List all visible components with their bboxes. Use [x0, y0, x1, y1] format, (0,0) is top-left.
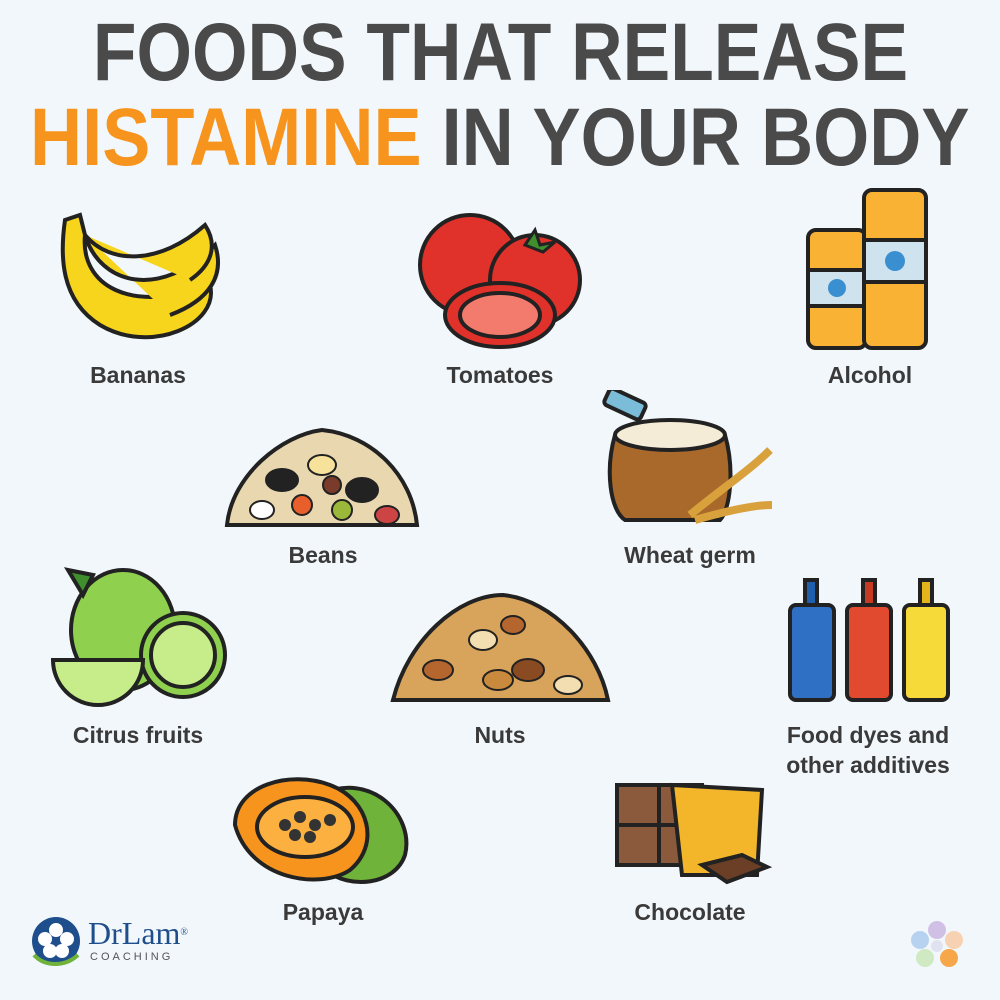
label: beans: Beans	[288, 542, 358, 568]
icon: beans	[224, 428, 420, 527]
logo: DrLam Coaching	[32, 915, 188, 966]
icon: wheat germ sack	[602, 390, 773, 524]
label: papaya: Papaya	[283, 899, 363, 925]
icon: tomatoes	[418, 213, 582, 349]
icon: papaya	[233, 777, 408, 884]
icon: food dye bottles	[788, 578, 950, 702]
label: alcohol: Alcohol	[828, 362, 912, 388]
label: bananas: Bananas	[90, 362, 186, 388]
icon: citrus fruits	[51, 567, 227, 707]
label: citrus fruits: Citrus fruits	[73, 722, 203, 748]
label: chocolate: Chocolate	[634, 899, 746, 925]
icon: bananas	[60, 212, 220, 340]
logo: DrLam Coaching: DrLam®	[88, 915, 188, 951]
icon: flower logo	[911, 921, 963, 967]
label: food dyes: Food dyes and	[787, 722, 949, 748]
label: food dyes	[786, 722, 950, 778]
title line 1: FOODS THAT RELEASE	[92, 7, 908, 98]
icon: chocolate	[615, 782, 772, 884]
label: tomatoes: Tomatoes	[447, 362, 553, 388]
logo: DrLam Coaching: COACHING	[90, 951, 173, 963]
label: food dyes: other additives	[786, 752, 950, 778]
icon: nuts	[390, 593, 610, 702]
label: nuts: Nuts	[474, 722, 526, 748]
title line 2: HISTAMINE IN YOUR BODY	[30, 92, 970, 183]
label: wheat germ: Wheat germ	[624, 542, 756, 568]
icon: alcohol cans	[806, 188, 928, 350]
